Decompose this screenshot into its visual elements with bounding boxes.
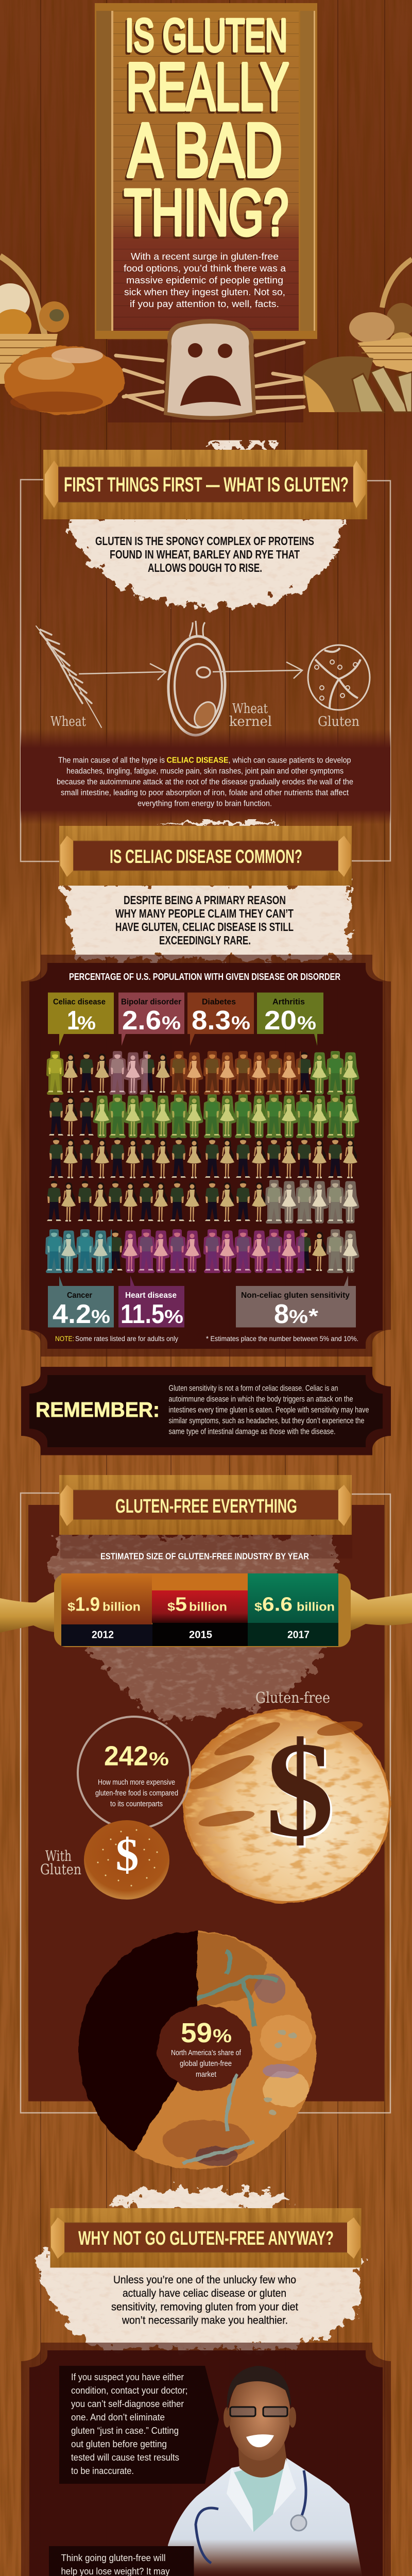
callout: lose weight (49, 2546, 194, 2576)
label: with gluten: With (45, 1848, 72, 1865)
callout: cancer (48, 1276, 114, 1329)
text: celiac rarity: DESPITE BEING A PRIMARY REASON (124, 893, 286, 907)
title text: THING? (124, 176, 288, 249)
intro text: massive epidemic of people getting (126, 275, 283, 285)
callout: 242 percent (78, 1717, 190, 1829)
callout: celiac disease: % (77, 1012, 96, 1033)
callout: celiac disease (48, 992, 114, 1046)
title text: THING? (123, 178, 287, 251)
band: celiac explanation (21, 729, 390, 824)
title text: IS GLUTEN (124, 11, 286, 63)
icon: chalk wheat (36, 626, 101, 727)
text block: same type of intestinal damage as those with the disease. (169, 1427, 336, 1436)
text: celiac rarity: WHY MANY PEOPLE CLAIM THEY CAN’T (115, 907, 294, 920)
callout: cancer: Cancer (67, 1291, 92, 1300)
heading: IS CELIAC DISEASE COMMON? (110, 846, 302, 867)
text: celiac disease paragraph: everything from energy to brain function. (138, 800, 272, 808)
frame lines: section one (21, 480, 390, 861)
callout: heart disease: % (164, 1306, 183, 1327)
text: gluten definition: FOUND IN WHEAT, BARLEY AND RYE THAT (110, 548, 300, 561)
icon: small gluten bun: $ (115, 1829, 139, 1880)
banner: why not go gluten-free (50, 2208, 362, 2268)
bar: 2015: 2015 (189, 1629, 212, 1640)
icon: dollar sign: $ (268, 1716, 336, 1867)
icon: round crusty loaf (4, 346, 125, 415)
text block: intestines every time gluten is eaten. People with sensitivity may have (169, 1405, 369, 1415)
text: celiac disease paragraph: because the autoimmune attack at the root of the disease gradually erodes the wall of the (57, 778, 353, 786)
chart: bread wreath pie (78, 1931, 316, 2170)
title text (123, 9, 289, 251)
text: celiac disease paragraph: , which can cause patients to develop (229, 756, 351, 765)
panel: advice (21, 2343, 391, 2576)
label: gluten-free: Gluten-free (255, 1689, 330, 1706)
panel: population chart (21, 955, 391, 1357)
number: 242 (104, 1740, 148, 1771)
callout: see your doctor: tested will cause test results (71, 2452, 179, 2463)
callout: see your doctor: to be inaccurate. (71, 2466, 134, 2476)
heading: GLUTEN-FREE EVERYTHING (115, 1496, 297, 1517)
callout: bipolar disorder: 2.6 (122, 1006, 161, 1036)
title text: REALLY (125, 51, 287, 126)
intro text: food options, you’d think there was a (124, 263, 286, 274)
callout: lose weight: Think going gluten-free will (61, 2553, 166, 2563)
text: unless you have celiac: actually have celiac disease or gluten (123, 2287, 286, 2299)
label: Wheat (232, 701, 268, 717)
label: with gluten (40, 1848, 81, 1878)
callout: 242 percent: % (149, 1749, 169, 1769)
stat: 59 percent: % (213, 2025, 232, 2046)
bar: 2017: 2017 (287, 1629, 310, 1640)
intro text: With a recent surge in gluten-free (131, 251, 279, 262)
flour patch: gluten definition (66, 515, 344, 608)
banner: gluten-free everything (59, 1475, 352, 1535)
intro text: sick when they ingest gluten. Not so, (124, 286, 285, 297)
callout: bipolar disorder: Bipolar disorder (121, 997, 181, 1007)
icon: small gluten bun (84, 1820, 169, 1900)
callout: heart disease (118, 1276, 184, 1329)
banner: is celiac common (59, 826, 352, 886)
bar: 2015: $ (167, 1600, 175, 1614)
bar: 2012 (61, 1573, 152, 1646)
callout: cancer: 4.2 (53, 1299, 91, 1329)
callout: heart disease: 11.5 (121, 1299, 164, 1329)
icon: rolling pin handles (0, 1589, 412, 1633)
icon: doctor (168, 2366, 363, 2576)
text: unless you have celiac: Unless you’re one of the unlucky few who (113, 2274, 296, 2286)
text: celiac disease paragraph (57, 756, 353, 808)
note: adult rates: Some rates listed are for adults only (75, 1335, 178, 1343)
text: celiac disease paragraph: CELIAC DISEASE (167, 756, 229, 765)
people row 5 (47, 1230, 357, 1272)
chart heading: industry size: ESTIMATED SIZE OF GLUTEN-FREE INDUSTRY BY YEAR (100, 1551, 309, 1561)
flour patch: why not gluten-free (39, 2189, 360, 2349)
people row 3 (49, 1138, 357, 1179)
people row 1 (48, 1052, 357, 1093)
callout: non-celiac gluten sensitivity: Non-celiac gluten sensitivity (241, 1291, 350, 1300)
flour patch: faded (52, 1535, 335, 1718)
caption (171, 2048, 242, 2079)
callout: bipolar disorder: % (162, 1012, 181, 1033)
callout: arthritis: % (297, 1012, 316, 1033)
callout: cancer: % (91, 1306, 110, 1327)
bar: 2015: billion (189, 1600, 227, 1614)
label (229, 701, 272, 730)
banner: what is gluten (43, 450, 367, 519)
text: gluten definition (95, 534, 314, 574)
callout: diabetes: % (231, 1012, 250, 1033)
stat: 59 percent (171, 2018, 242, 2079)
icon: sad bread slice (164, 319, 256, 420)
label: with gluten: Gluten (40, 1861, 81, 1878)
label: Wheat (50, 714, 86, 730)
caption: North America’s share of (171, 2048, 242, 2057)
text: celiac disease paragraph: headaches, tingling, fatigue, muscle pain, skin rashes, joint pain and other symptoms (66, 767, 344, 776)
callout: arthritis: Arthritis (272, 997, 305, 1007)
arrow (79, 664, 166, 680)
bar: 2012: billion (102, 1600, 141, 1614)
title text: A BAD (126, 110, 281, 195)
icon: seeded loaf and slices (302, 357, 412, 412)
people row 2 (49, 1095, 357, 1137)
caption: global gluten-free (180, 2059, 232, 2068)
callout: celiac disease: 1 (67, 1006, 79, 1036)
flour splatter above first banner (206, 442, 278, 450)
icon: large gluten-free loaf (183, 1709, 391, 1903)
callout: non-celiac gluten sensitivity: % (289, 1306, 308, 1327)
bar: 2012: $ (67, 1600, 75, 1614)
bar: 2017 (248, 1573, 338, 1646)
diagram: wheat to gluten (36, 621, 370, 736)
icon: dollar sign: $ (266, 1714, 334, 1865)
callout: see your doctor (59, 2366, 219, 2484)
stat: 59 percent: 59 (181, 2018, 212, 2048)
intro text (124, 251, 286, 309)
bar: 2017: billion (297, 1600, 335, 1614)
chart: rolling pin (0, 1573, 412, 1647)
icon: wheat kernel (167, 621, 227, 736)
callout: see your doctor: out gluten before getting (71, 2439, 167, 2449)
callout: non-celiac gluten sensitivity: * (308, 1305, 319, 1328)
callout: see your doctor: gluten “just in case.” Cutting (71, 2426, 179, 2436)
callout: bipolar disorder (118, 992, 184, 1046)
text: gluten definition: GLUTEN IS THE SPONGY COMPLEX OF PROTEINS (95, 534, 314, 548)
bar: 2012: 1.9 (75, 1594, 100, 1616)
heading: REMEMBER: (36, 1398, 160, 1421)
callout: celiac disease: Celiac disease (53, 997, 106, 1007)
title text: IS GLUTEN (125, 9, 287, 61)
label: Gluten (318, 714, 359, 730)
icon: wheat stalks (116, 343, 304, 412)
bar: 2015 (152, 1573, 248, 1646)
text: celiac rarity (115, 893, 294, 947)
chalk ring (78, 1717, 190, 1829)
people row 4 (47, 1181, 357, 1222)
callout: see your doctor: If you suspect you have either (71, 2372, 184, 2382)
text: gluten definition: ALLOWS DOUGH TO RISE. (148, 561, 262, 574)
callout: non-celiac gluten sensitivity (236, 1276, 356, 1329)
text: unless you have celiac: sensitivity, removing gluten from your diet (111, 2301, 298, 2313)
text: celiac disease paragraph: The main cause of all the hype is (58, 756, 165, 765)
label: kernel (229, 714, 272, 730)
callout: diabetes: 8.3 (192, 1006, 231, 1036)
panel: title sign (95, 3, 317, 339)
intro text: if you pay attention to, well, facts. (130, 298, 279, 309)
callout: diabetes (187, 992, 254, 1046)
title text: A BAD (128, 108, 282, 193)
callout: non-celiac gluten sensitivity: 8 (274, 1299, 289, 1329)
text: celiac rarity: HAVE GLUTEN, CELIAC DISEASE IS STILL (115, 920, 294, 934)
note: estimate range: * Estimates place the number between 5% and 10%. (206, 1335, 358, 1343)
bar: 2012: 2012 (92, 1629, 114, 1640)
text: celiac rarity: EXCEEDINGLY RARE. (159, 934, 251, 947)
bar: 2017: $ (254, 1600, 262, 1614)
icon: right bread basket (349, 259, 412, 374)
icon: left bread basket (0, 256, 69, 384)
panel: gluten-free everything backdrop (28, 1505, 384, 2102)
callout: arthritis: 20 (264, 1006, 297, 1036)
icon: gluten circle (308, 645, 370, 710)
text: unless you have celiac: won’t necessarily make you healthier. (122, 2314, 288, 2327)
flour splatter above second banner (160, 820, 283, 825)
chart heading: PERCENTAGE OF U.S. POPULATION WITH GIVEN DISEASE OR DISORDER (69, 972, 340, 982)
dark table band behind breads (108, 340, 303, 422)
bar: 2015: 5 (175, 1594, 187, 1616)
callout: arthritis (257, 992, 323, 1046)
callout: diabetes: Diabetes (202, 997, 236, 1007)
caption: market (196, 2070, 217, 2079)
caption (95, 1778, 178, 1808)
caption: gluten-free food is compared (95, 1789, 178, 1798)
text block (169, 1384, 369, 1436)
caption: How much more expensive (98, 1778, 175, 1787)
callout: see your doctor: condition, contact your doctor; (71, 2385, 187, 2396)
flour patch: celiac rarity (64, 882, 349, 958)
callout: see your doctor: one. And don’t eliminate (71, 2412, 165, 2422)
callout: see your doctor: you can’t self-diagnose either (71, 2399, 184, 2409)
caption: to its counterparts (110, 1800, 163, 1808)
note: adult rates: NOTE: (55, 1335, 74, 1343)
frame lines: section three (21, 1493, 390, 2113)
bar: 2017: 6.6 (262, 1594, 293, 1616)
arrow (213, 662, 302, 679)
panel: remember (21, 1367, 391, 1455)
text block: autoimmune disease in which the body triggers an attack on the (169, 1395, 353, 1403)
text block: Gluten sensitivity is not a form of celiac disease. Celiac is an (169, 1384, 338, 1393)
text block: similar symptoms, such as headaches, but they don’t experience the (169, 1417, 365, 1425)
callout: heart disease: Heart disease (125, 1291, 177, 1300)
text: unless you have celiac (111, 2274, 298, 2327)
title text: REALLY (126, 49, 289, 124)
text: celiac disease paragraph: small intestine, leading to poor absorption of iron, folate and other nutrients that affect (61, 788, 349, 798)
